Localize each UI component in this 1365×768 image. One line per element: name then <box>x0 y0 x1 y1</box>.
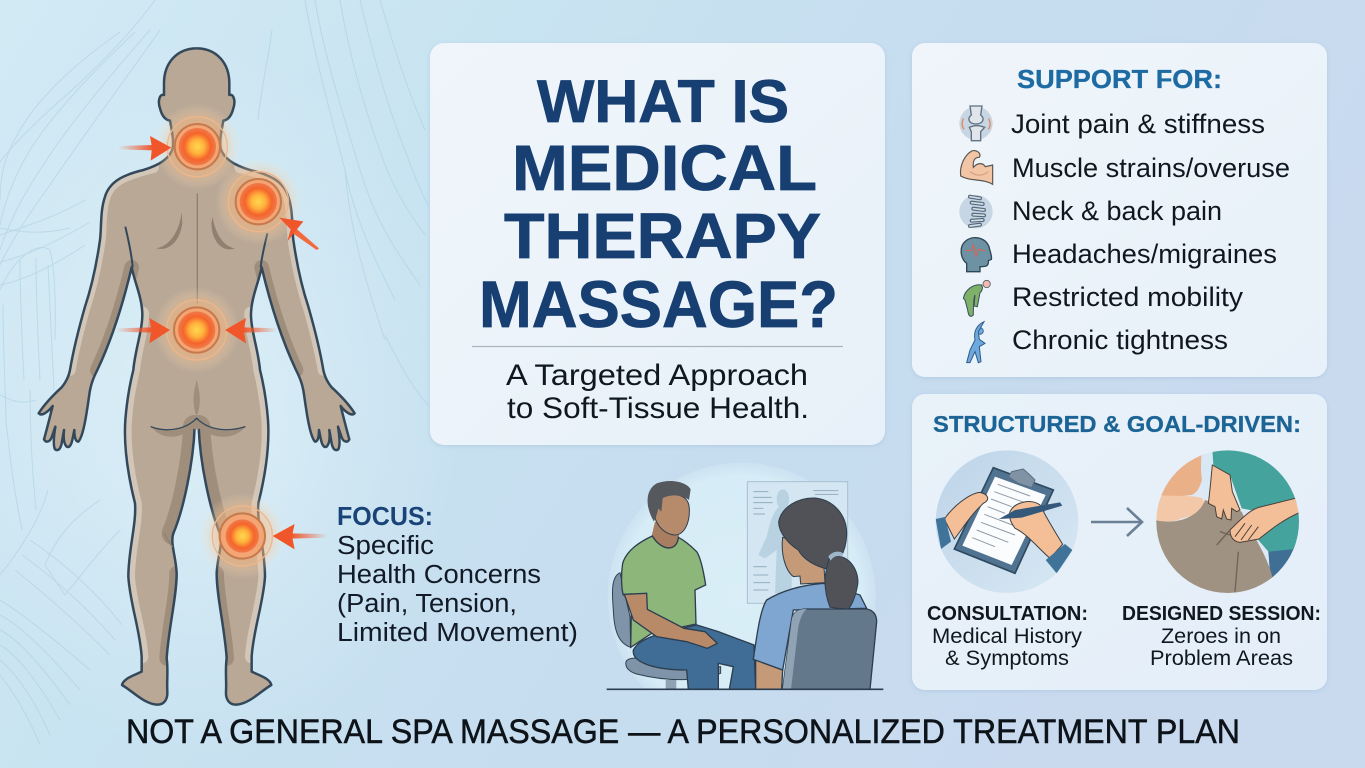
hotspot: neck <box>154 103 241 190</box>
chair: patient <box>612 573 721 689</box>
title: MASSAGE? <box>479 267 838 341</box>
title: WHAT IS <box>537 68 789 135</box>
icon: head with pulse <box>961 238 992 272</box>
subtitle <box>506 359 809 425</box>
caption: consultation: & Symptoms <box>945 647 1069 670</box>
list text: Restricted mobility <box>1012 282 1244 312</box>
arrow: shoulder <box>279 218 319 250</box>
subtitle: A Targeted Approach <box>506 359 808 392</box>
patient <box>622 481 756 689</box>
icon: muscle <box>960 151 993 184</box>
arrow: lower back right <box>225 318 277 343</box>
caption: consultation <box>927 603 1088 670</box>
list text: Headaches/migraines <box>1012 239 1277 269</box>
panel: title <box>430 43 885 445</box>
arrow: consultation to session <box>1091 508 1142 536</box>
heading: STRUCTURED & GOAL-DRIVEN: <box>933 411 1301 437</box>
caption: designed session: DESIGNED SESSION: <box>1122 603 1321 625</box>
panel: structured and goal-driven <box>912 394 1327 690</box>
human figure, back view <box>39 48 355 705</box>
focus text block: Limited Movement) <box>337 619 578 647</box>
chair: clinician <box>783 609 877 689</box>
decorative muscle line art <box>0 0 428 745</box>
wall chart <box>747 482 848 603</box>
arrow: neck <box>118 136 171 161</box>
clinician <box>753 498 867 689</box>
heading: SUPPORT FOR: <box>1017 66 1222 94</box>
icon: restricted mobility figure <box>963 280 990 316</box>
caption: designed session: Problem Areas <box>1150 647 1293 670</box>
title <box>479 68 838 341</box>
list text: Joint pain & stiffness <box>1011 109 1265 139</box>
arrow: lower back left <box>116 318 170 343</box>
focus text block: Health Concerns <box>337 561 541 589</box>
list text: Chronic tightness <box>1012 325 1228 355</box>
hotspot: shoulder <box>215 158 302 245</box>
pain hotspots and arrows <box>116 103 327 579</box>
focus text block: FOCUS: <box>337 503 433 531</box>
focus text block: (Pain, Tension, <box>337 590 517 618</box>
caption: consultation: Medical History <box>932 625 1083 648</box>
focus text block <box>337 503 578 647</box>
icon: stretching figure <box>967 322 985 363</box>
hotspot: lower back <box>153 287 240 373</box>
caption: consultation: CONSULTATION: <box>927 603 1088 625</box>
caption: designed session <box>1122 603 1321 670</box>
hotspot: knee <box>199 493 286 579</box>
arrow: knee <box>273 524 327 549</box>
list text: Muscle strains/overuse <box>1012 153 1290 183</box>
illustration: consultation scene <box>606 466 884 690</box>
title: THERAPY <box>504 200 821 272</box>
icon: joint <box>959 106 993 141</box>
focus text block: Specific <box>337 532 434 560</box>
illustration: hands-on session <box>1155 448 1302 595</box>
caption: designed session: Zeroes in on <box>1161 625 1281 648</box>
footer banner: NOT A GENERAL SPA MASSAGE — A PERSONALIZED TREATMENT PLAN <box>126 713 1240 751</box>
illustration: clipboard consultation <box>936 450 1078 593</box>
subtitle: to Soft-Tissue Health. <box>507 392 809 425</box>
panel: support for <box>912 43 1327 377</box>
title: MEDICAL <box>512 132 817 204</box>
icon: spine <box>959 195 993 228</box>
list text: Neck & back pain <box>1012 196 1222 226</box>
list text <box>1011 109 1290 355</box>
